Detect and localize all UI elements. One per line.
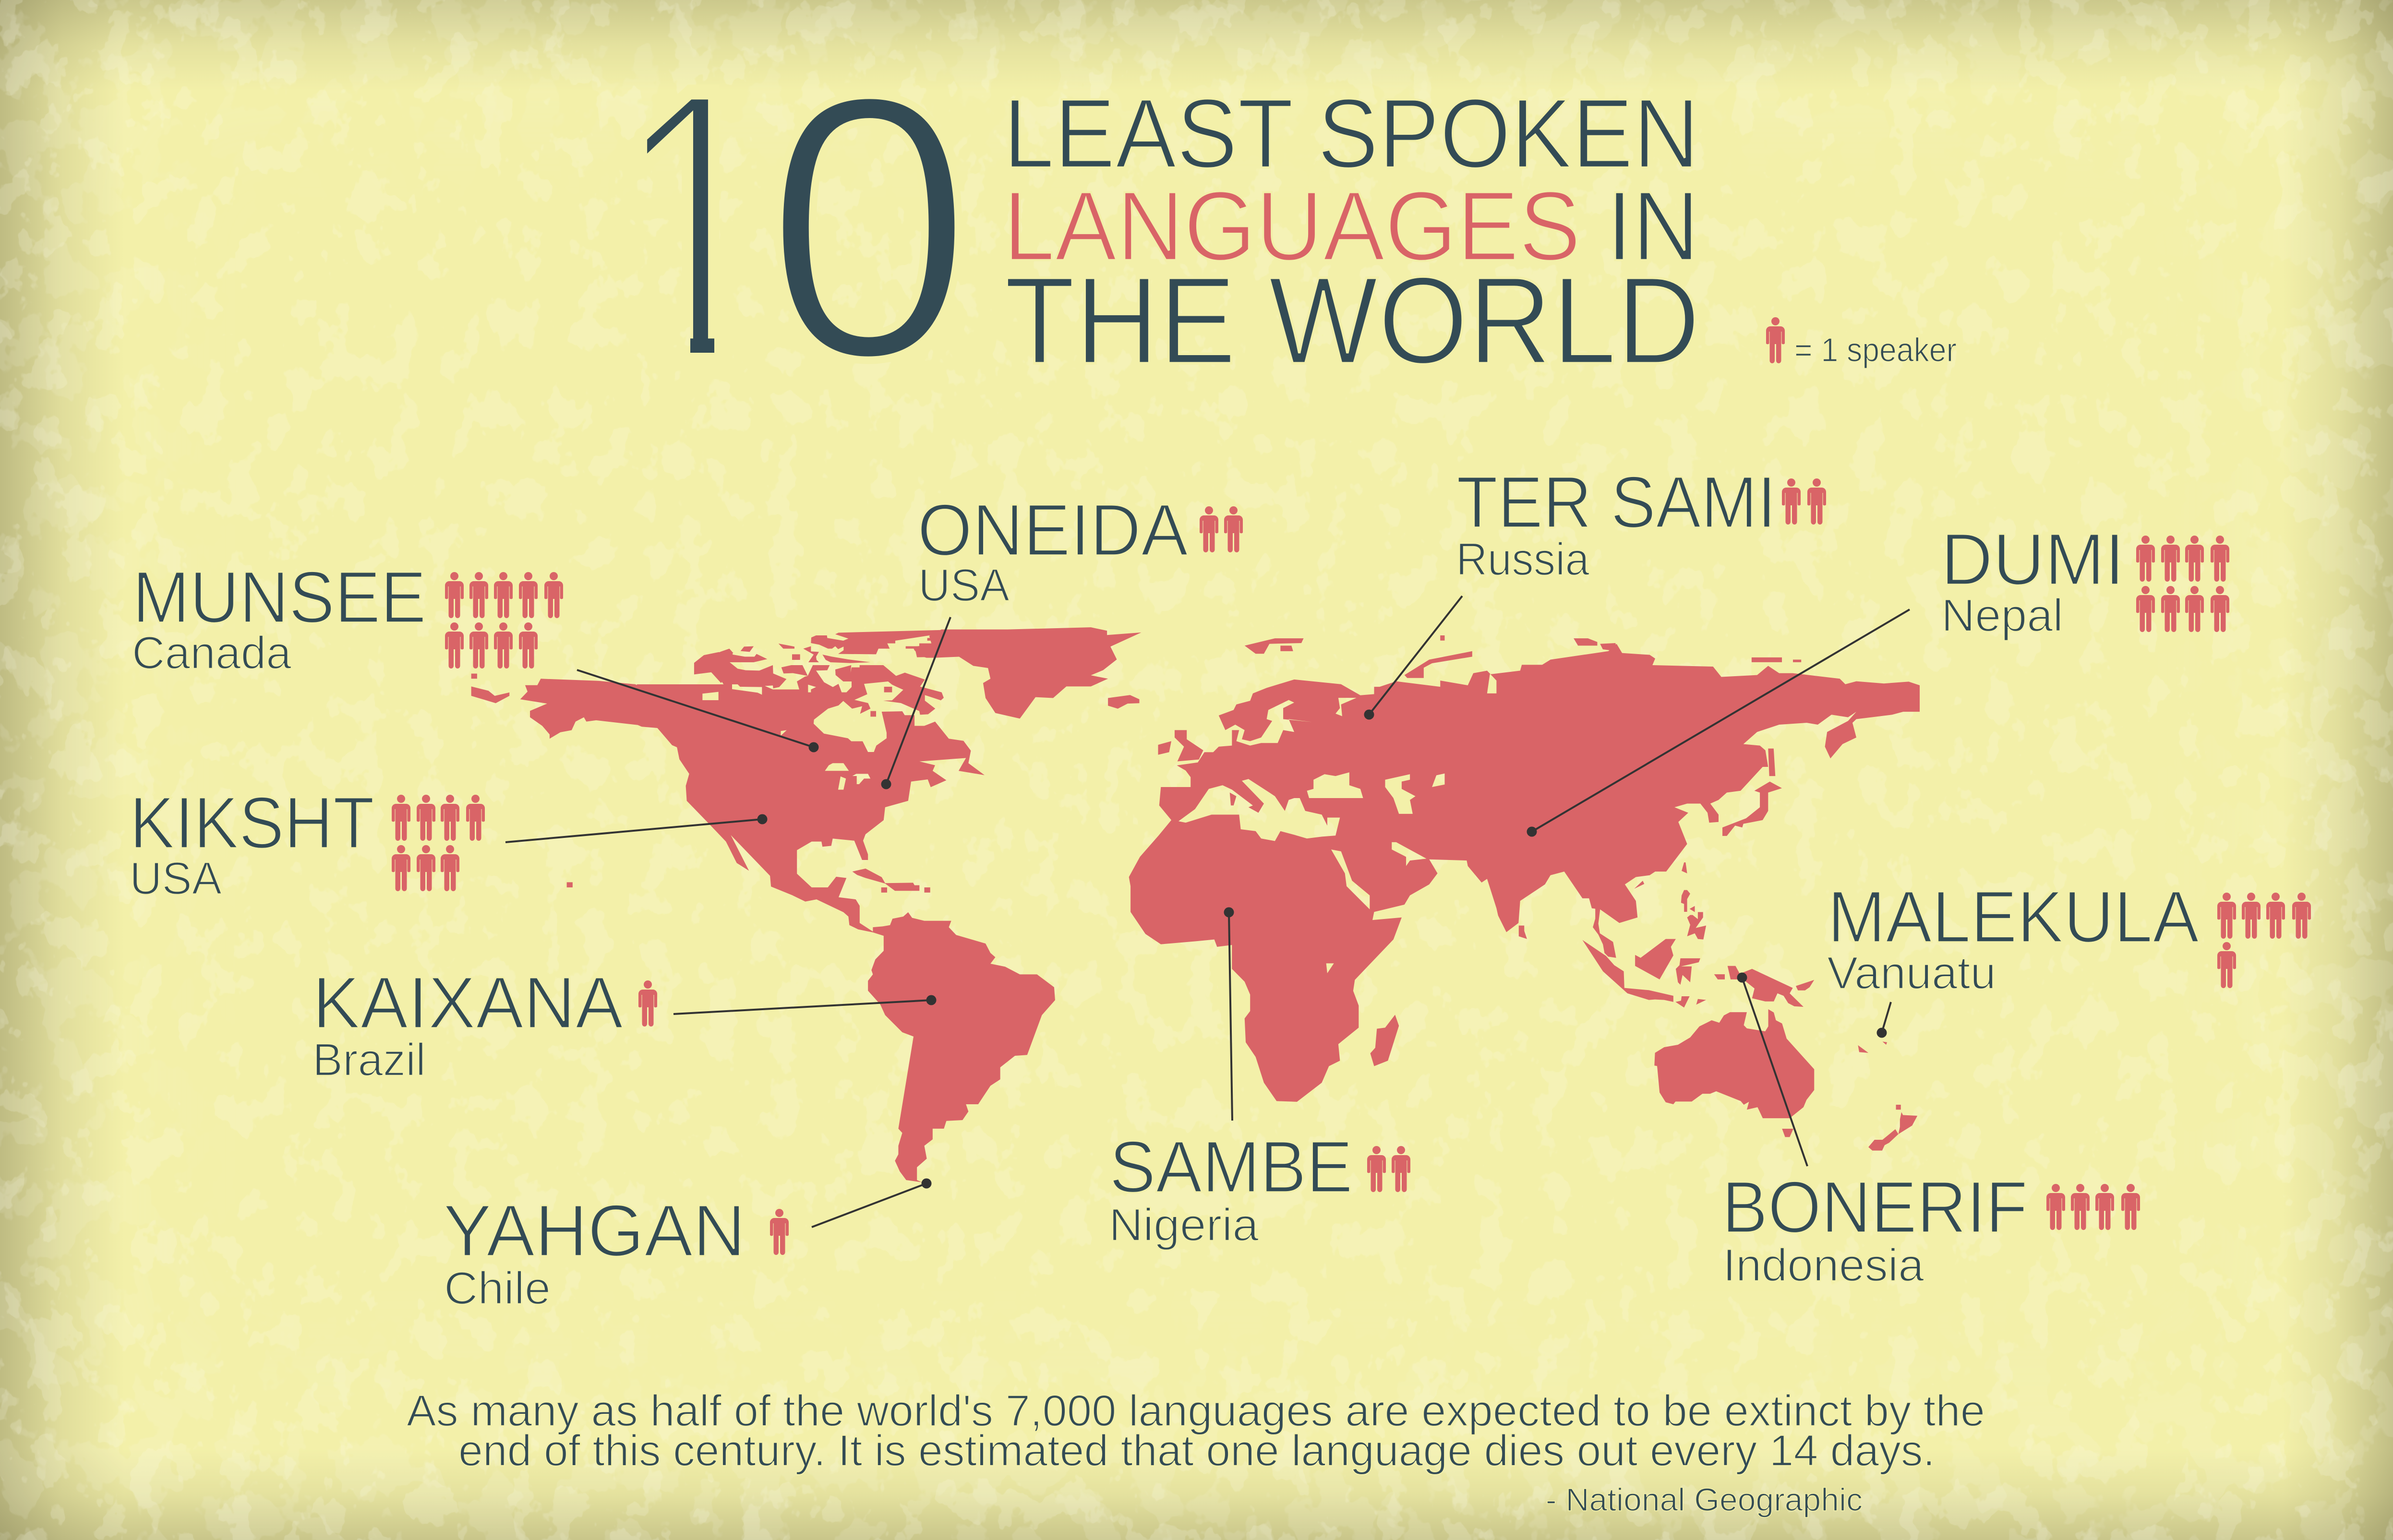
country: Vanuatu <box>1827 947 1996 999</box>
callout: Yahgan <box>443 1179 931 1314</box>
speaker icons: 1 <box>770 1209 789 1255</box>
title number 10: 0 <box>765 18 973 436</box>
footer quote <box>407 1386 1985 1518</box>
leader line <box>1364 596 1462 720</box>
map: Eurasian islands <box>1158 635 1801 1066</box>
map: Alaskan and Pacific islands <box>471 674 573 887</box>
callout: Kaixana <box>313 962 936 1086</box>
language name: ONEIDA <box>917 489 1188 571</box>
country: Canada <box>132 627 292 679</box>
callout: Bonerif <box>1722 972 2140 1291</box>
speaker icons: 2 <box>1200 506 1243 552</box>
leader line <box>577 670 819 752</box>
country: Indonesia <box>1723 1240 1924 1291</box>
speaker icons: 1 <box>638 980 657 1027</box>
callout: Oneida <box>881 489 1243 789</box>
callout: Ter Sami <box>1364 461 1826 720</box>
leader line <box>1527 609 1910 837</box>
language name: SAMBE <box>1109 1126 1353 1208</box>
callout: Sambe <box>1109 907 1410 1251</box>
callout: Kiksht <box>130 782 767 904</box>
leader line <box>881 617 950 789</box>
map: Southeast Asia and Oceania <box>1519 862 1917 1150</box>
speaker icons: 4 <box>2046 1184 2140 1230</box>
legend text: = 1 speaker <box>1794 331 1957 369</box>
speaker icons: 7 <box>392 795 485 891</box>
speaker icons: 8 <box>2136 536 2229 632</box>
language name: MALEKULA <box>1828 876 2199 958</box>
title line 1: LEAST SPOKEN <box>1003 78 1699 189</box>
world map <box>471 627 1920 1182</box>
quote line 2: end of this century. It is estimated that one language dies out every 14 days. <box>458 1426 1935 1475</box>
speaker icons: 2 <box>1367 1146 1410 1192</box>
language name: MUNSEE <box>132 556 426 638</box>
country: USA <box>918 560 1010 611</box>
language name: YAHGAN <box>443 1190 746 1272</box>
language name: KAIXANA <box>313 962 623 1044</box>
map: northern Canada <box>637 630 960 720</box>
speaker icons: 9 <box>445 572 563 669</box>
title number 10: 1 <box>613 7 778 443</box>
callout: Malekula <box>1827 876 2311 1038</box>
language name: DUMI <box>1941 518 2125 600</box>
legend: person icon equals 1 speaker <box>1766 317 1957 369</box>
country: Nepal <box>1941 590 2063 641</box>
leader line <box>1224 907 1234 1121</box>
country: Chile <box>444 1263 551 1314</box>
leader line <box>505 814 767 842</box>
quote source: - National Geographic <box>1546 1482 1863 1518</box>
leader line <box>1877 1002 1891 1038</box>
leader line <box>673 995 936 1014</box>
title number 10 <box>613 7 973 443</box>
language name: BONERIF <box>1722 1166 2028 1248</box>
leader line <box>812 1179 931 1227</box>
language name: KIKSHT <box>130 782 374 864</box>
callout: Munsee <box>132 556 819 752</box>
map: Caribbean <box>853 869 930 893</box>
country: Brazil <box>313 1034 426 1086</box>
country: Nigeria <box>1109 1199 1259 1251</box>
title <box>637 84 1694 365</box>
icon: person <box>1766 317 1785 363</box>
map: Greenland and far-west Arctic islands <box>694 627 1142 718</box>
speaker icons: 2 <box>1782 478 1826 525</box>
callout: Dumi <box>1527 518 2229 837</box>
map: Americas <box>471 627 1142 1182</box>
title line 2: LANGUAGES IN <box>1003 171 1699 281</box>
speaker icons: 5 <box>2217 893 2311 988</box>
quote line 1: As many as half of the world's 7,000 languages are expected to be extinct by the <box>407 1386 1985 1435</box>
leader line <box>1737 972 1807 1166</box>
country: Russia <box>1456 534 1590 585</box>
language name: TER SAMI <box>1456 461 1776 543</box>
map: Europe, Asia and Africa <box>1129 635 1920 1102</box>
country: USA <box>130 853 222 904</box>
title line 3: THE WORLD <box>1004 251 1700 390</box>
